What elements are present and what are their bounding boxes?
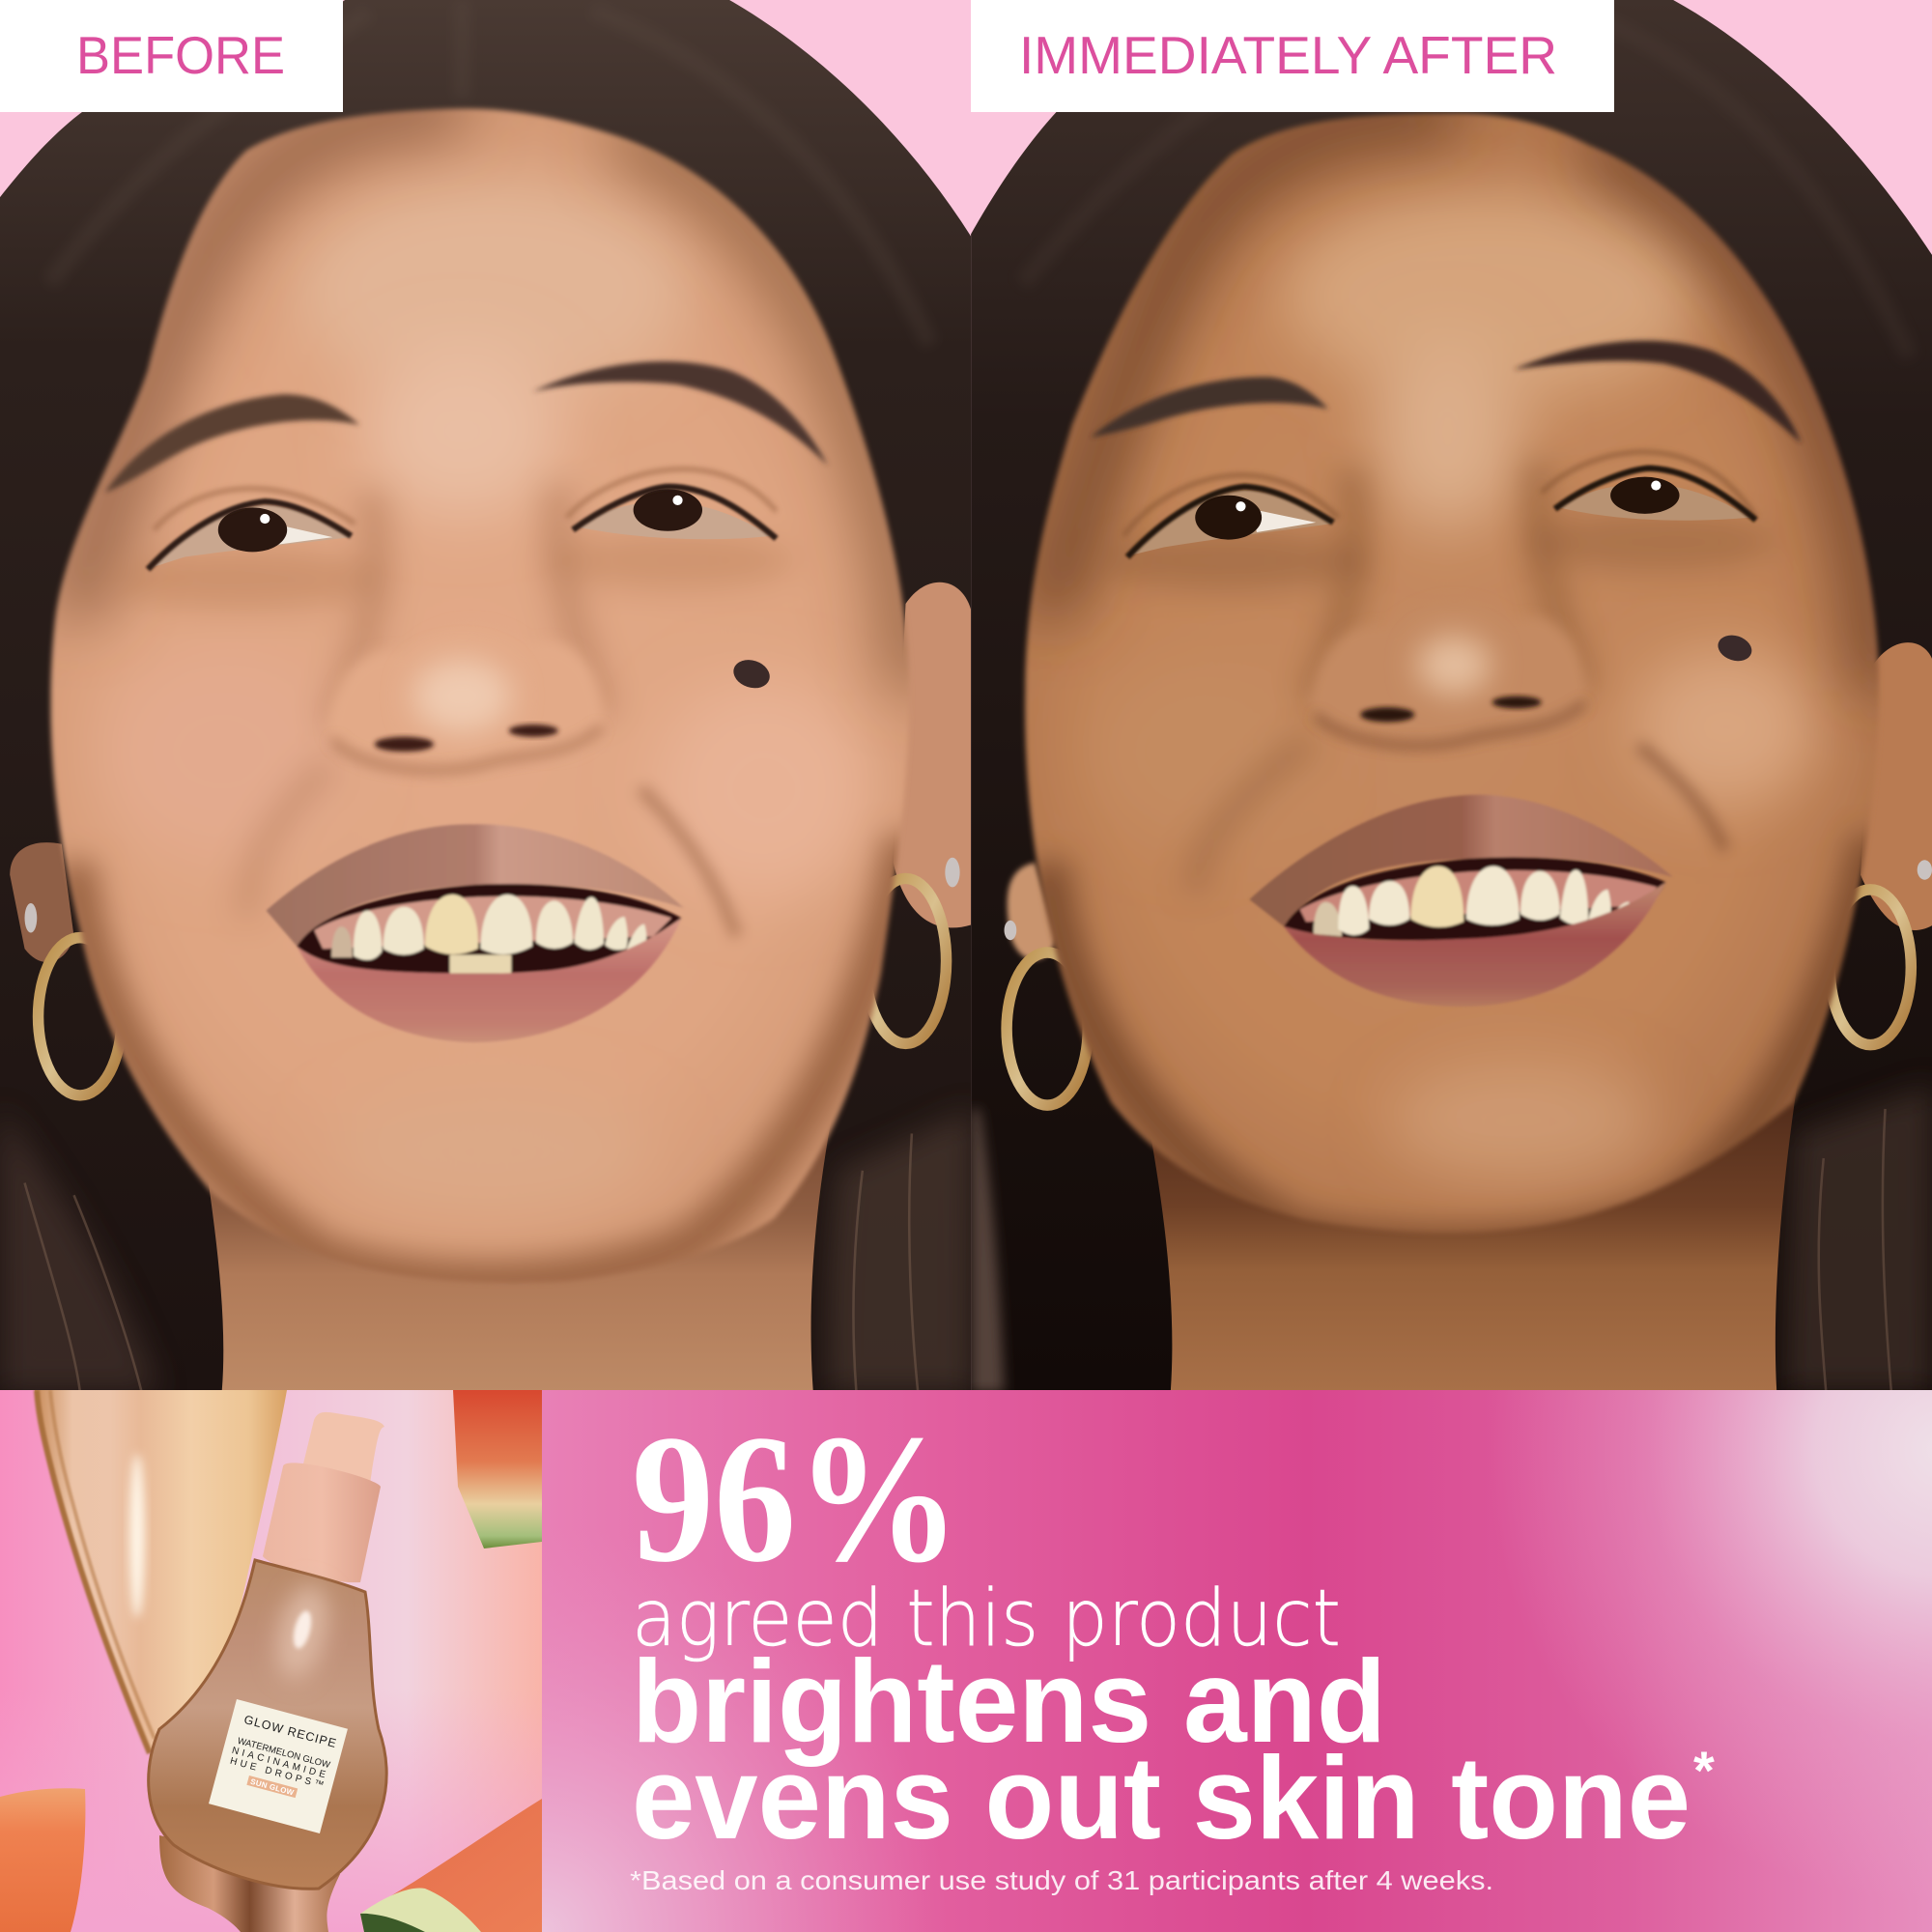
drip — [159, 1835, 340, 1932]
eyebrows: before — [104, 361, 828, 493]
bottle body — [149, 1560, 386, 1889]
after label: IMMEDIATELY AFTER — [1019, 25, 1557, 85]
mole: after — [1715, 631, 1755, 666]
left eye: before — [148, 489, 355, 569]
text: brightens and: brightens and — [632, 1635, 1386, 1767]
product label: WATERMELON GLOW — [236, 1736, 331, 1771]
collar — [263, 1463, 381, 1582]
mole: before — [733, 660, 770, 688]
right eye: before — [567, 469, 777, 539]
after label — [971, 0, 1614, 112]
ears: before — [10, 582, 974, 962]
hair: before — [0, 0, 974, 1392]
face: before — [46, 104, 908, 1283]
hair: after — [971, 0, 1932, 1392]
before label — [0, 0, 343, 112]
right eye: after — [1542, 452, 1756, 521]
footnote: *Based on a consumer use study of 31 participants after 4 weeks. — [630, 1865, 1493, 1895]
panel: before photo — [0, 0, 974, 1392]
panel: product image — [0, 1390, 542, 1932]
earrings: after — [1005, 860, 1932, 1105]
nose: after — [1310, 600, 1587, 746]
product swatch smear — [35, 1390, 287, 1768]
eyebrows: after — [1091, 341, 1802, 443]
panel: after photo — [971, 0, 1932, 1392]
product label: SUN GLOW — [249, 1777, 295, 1798]
neck: after — [1146, 1072, 1799, 1392]
watermelon bottom left — [0, 1788, 85, 1932]
before label: BEFORE — [76, 25, 285, 85]
pump nozzle — [298, 1412, 384, 1502]
panel: claim background — [542, 1390, 1932, 1932]
mouth: after — [1249, 795, 1673, 1007]
mouth: before — [267, 824, 684, 1042]
ears: after — [1008, 642, 1932, 960]
watermelon top right — [453, 1390, 542, 1548]
left eye: after — [1123, 475, 1338, 557]
text: evens out skin tone: evens out skin tone — [632, 1732, 1690, 1863]
text: agreed this product: agreed this product — [632, 1574, 1341, 1664]
neck: before — [209, 1126, 830, 1390]
asterisk: * — [1693, 1740, 1715, 1801]
face: after — [971, 74, 1932, 1306]
earrings: before — [25, 858, 960, 1095]
product label: GLOW RECIPE — [242, 1713, 337, 1750]
product bottle — [149, 1412, 386, 1932]
stat: 96%: 96% — [632, 1398, 960, 1601]
watermelon bottom right — [360, 1799, 542, 1932]
product label: NIACINAMIDE — [231, 1746, 327, 1780]
nose: before — [327, 624, 604, 770]
product label — [209, 1699, 348, 1833]
product label: HUE DROPS™ — [229, 1756, 325, 1791]
